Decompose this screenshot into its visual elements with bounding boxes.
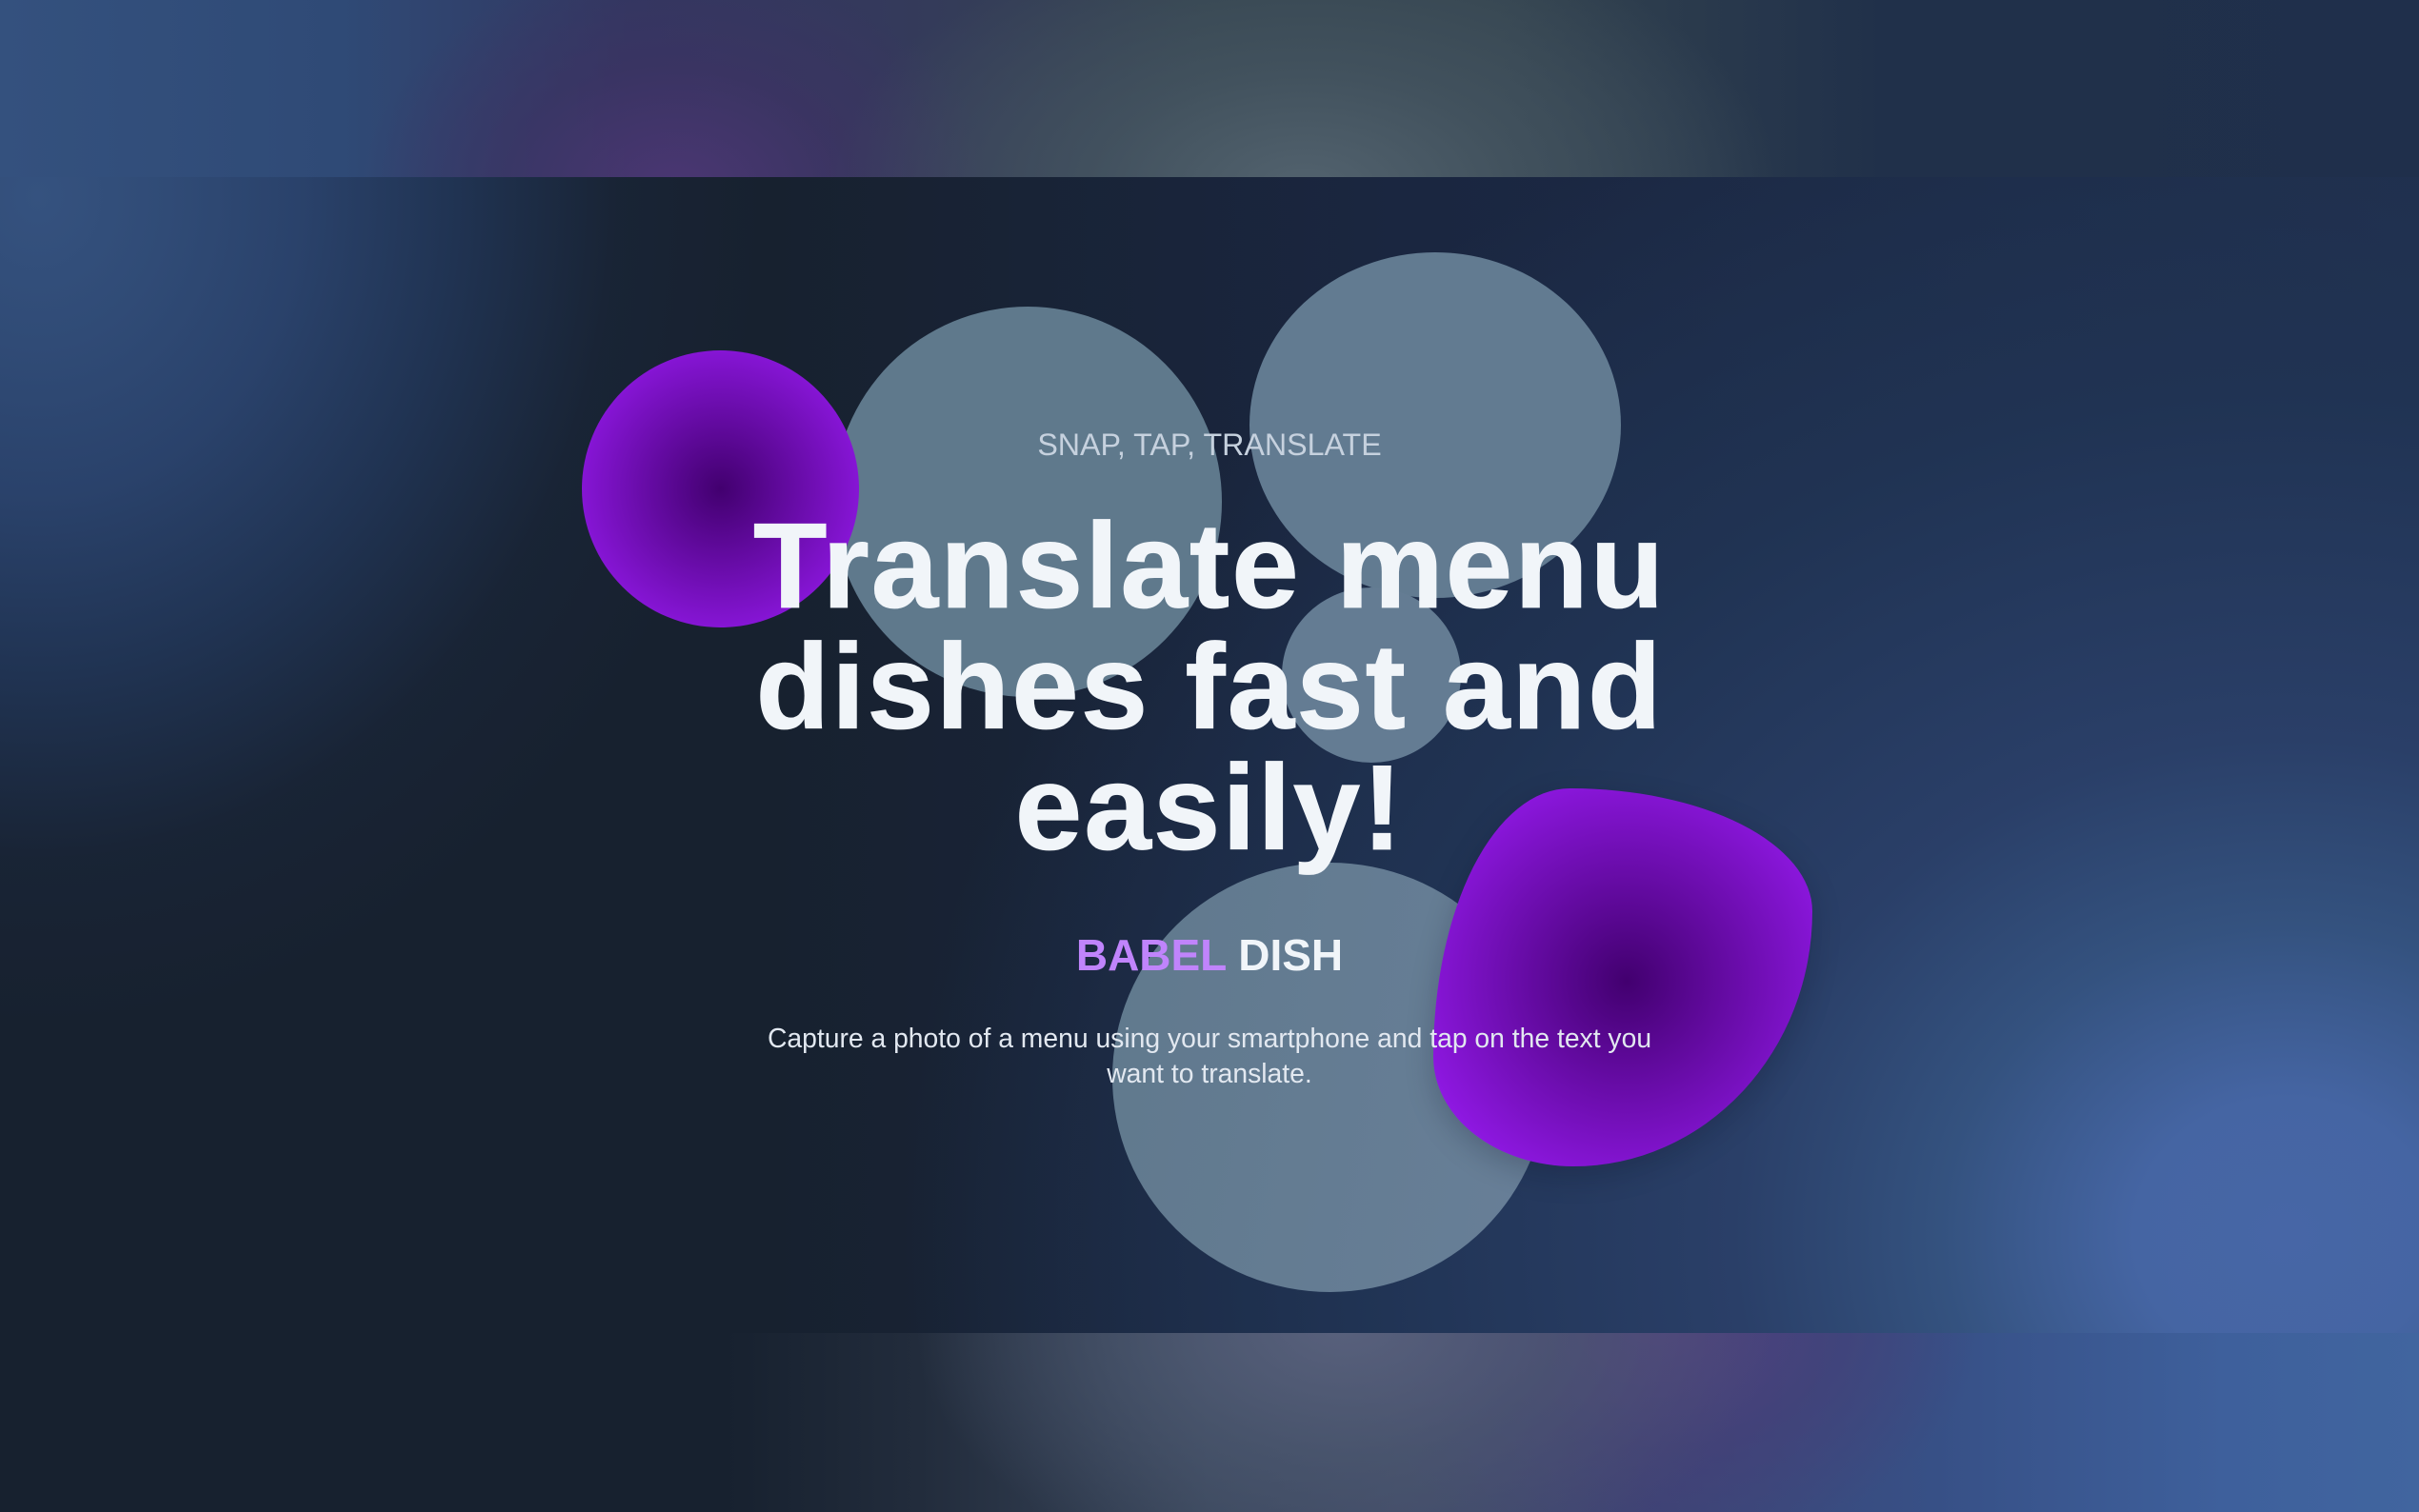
background: main panel: [0, 177, 2419, 1333]
title: Translate menu: [753, 498, 1666, 633]
background: bottom band: [0, 1333, 2419, 1512]
brand name: BABEL DISH: [1076, 930, 1343, 980]
circle: large bottom gray: [1112, 863, 1548, 1292]
circle: upper middle gray: [833, 307, 1222, 697]
description: [768, 1023, 1651, 1088]
description: want to translate.: [1107, 1058, 1312, 1088]
circle: small center gray: [1282, 587, 1461, 763]
blob: purple gradient: [1433, 788, 1812, 1166]
title: easily!: [1015, 740, 1404, 875]
title: [753, 498, 1666, 875]
title: dishes fast and: [755, 619, 1664, 754]
background: top band: [0, 0, 2419, 177]
eyebrow text: SNAP, TAP, TRANSLATE: [1037, 428, 1382, 462]
circle: upper right gray: [1249, 252, 1621, 598]
description: Capture a photo of a menu using your smartphone and tap on the text you: [768, 1023, 1651, 1053]
circle: purple gradient: [582, 350, 859, 627]
